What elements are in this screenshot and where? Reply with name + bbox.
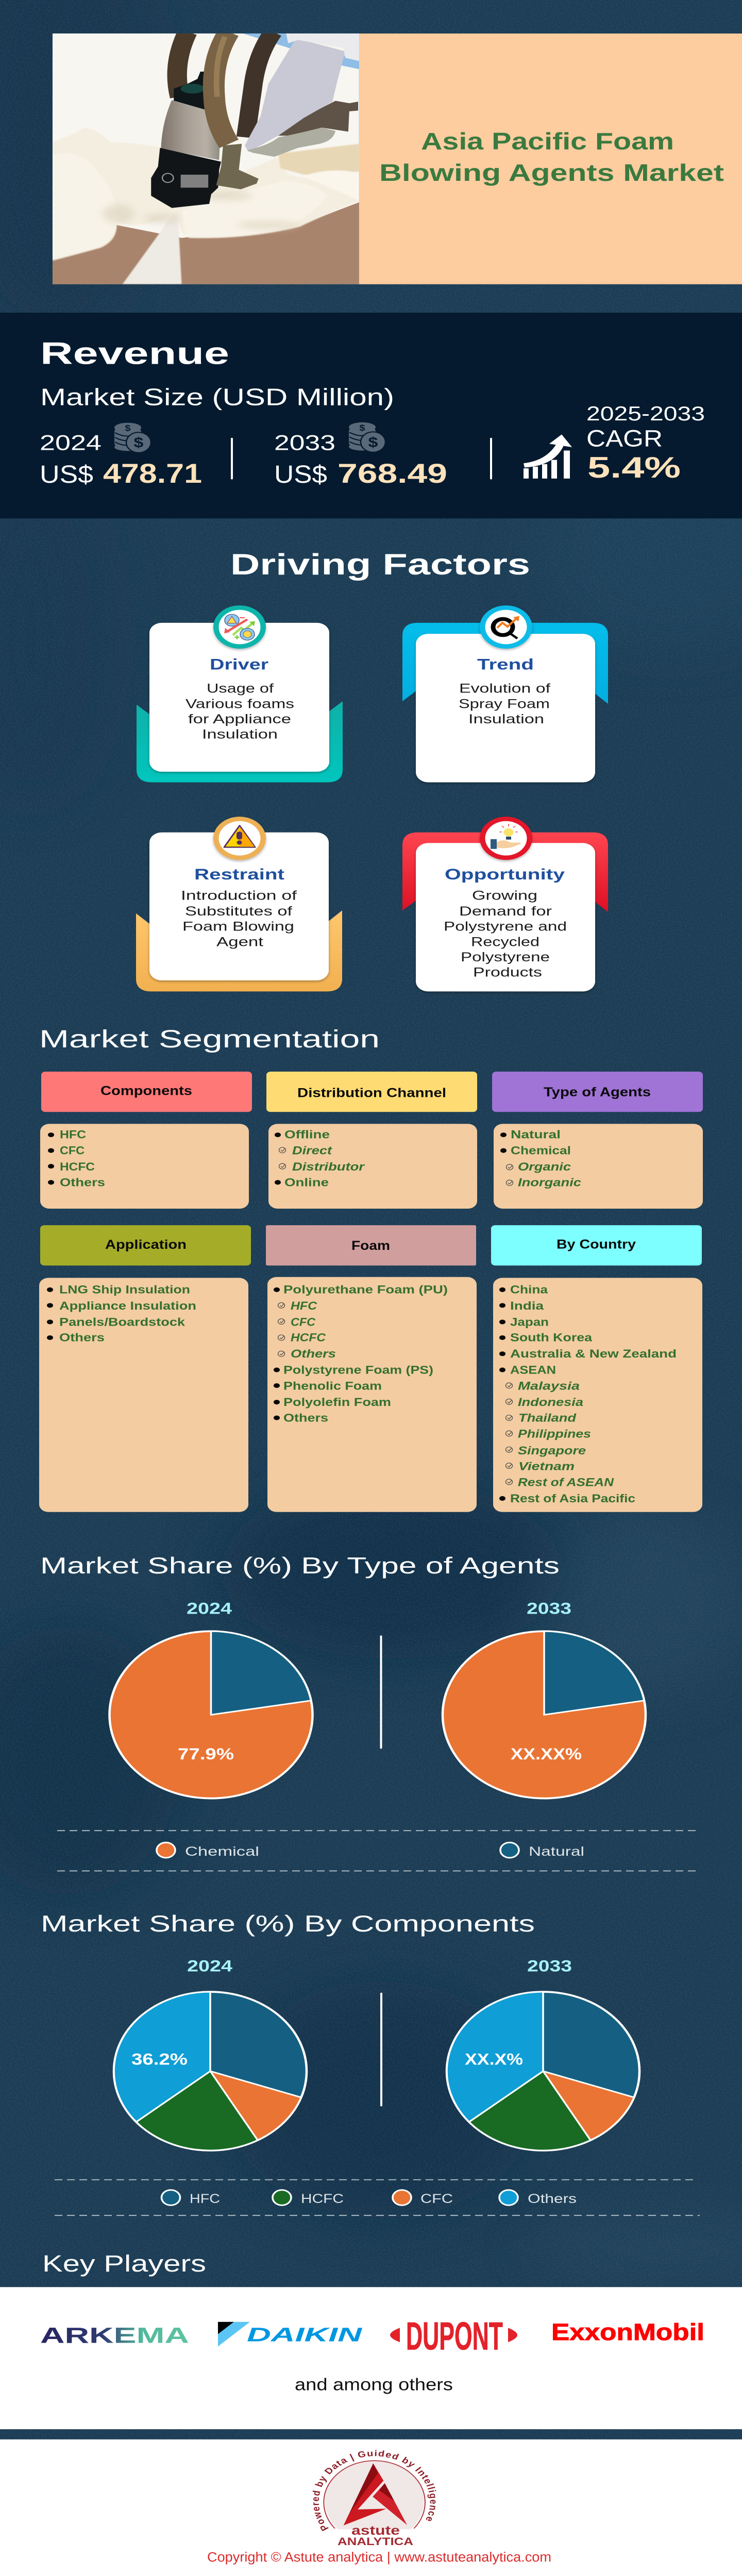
value label XX.XX%: XX.XX%	[511, 1745, 582, 1763]
legend: type of agents: Natural	[529, 1844, 584, 1858]
card: restraint	[136, 817, 342, 991]
list: by country: ASEAN	[510, 1364, 556, 1377]
chart: type of agents 2024	[109, 1600, 312, 1799]
list: distribution channel: Offline	[284, 1128, 330, 1141]
list: foam: CFC	[291, 1316, 316, 1329]
heading: trend: Trend	[477, 655, 534, 673]
text: driver description: Insulation	[202, 727, 278, 741]
icon: coin stack 2024: $	[125, 423, 131, 433]
panel: application header: Application	[105, 1238, 187, 1252]
stat: 2033 revenue: 768.49	[338, 459, 447, 489]
stat: 2033 revenue: 2033	[274, 431, 335, 455]
list: components	[40, 1124, 249, 1209]
CAGR stat: CAGR	[586, 425, 663, 451]
list: application: Appliance Insulation	[59, 1300, 196, 1312]
list: by country: Vietnam	[518, 1460, 575, 1473]
logo: Astute Analytica: ANALYTICA	[338, 2535, 413, 2548]
list: foam: HCFC	[291, 1332, 326, 1344]
list: by country: Indonesia	[518, 1396, 583, 1409]
panel: type of agents header	[492, 1072, 703, 1112]
list: by country: India	[510, 1300, 544, 1312]
panel: distribution channel header: Distribution Channel	[297, 1086, 446, 1100]
icon: coin stack 2033	[349, 422, 385, 452]
text: driver description: Usage of	[207, 681, 274, 696]
panel: by country header	[491, 1225, 702, 1265]
revenue panel	[0, 313, 742, 518]
panel: application header	[40, 1225, 251, 1265]
title	[379, 128, 724, 186]
gun body	[161, 100, 221, 160]
icon: coin stack 2024	[114, 423, 151, 453]
logo: Astute Analytica: astute	[351, 2523, 400, 2538]
panel: components header: Components	[100, 1083, 192, 1098]
list: distribution channel: Online	[284, 1176, 329, 1189]
heading: restraint: Restraint	[194, 866, 284, 883]
list: type of agents: Organic	[518, 1161, 571, 1173]
divider	[380, 1993, 382, 2106]
title: Blowing Agents Market	[379, 159, 724, 186]
list: by country: Rest of ASEAN	[518, 1477, 614, 1489]
list: type of agents: Inorganic	[518, 1176, 581, 1189]
pie: 2033 agents	[443, 1631, 646, 1799]
list: type of agents: Chemical	[511, 1145, 571, 1157]
text: trend description	[459, 681, 550, 726]
card: trend	[402, 605, 608, 782]
text: restraint description: Agent	[216, 935, 263, 949]
stat: 2024 revenue: 478.71	[103, 459, 202, 489]
connector	[216, 144, 259, 189]
logo: Daikin	[218, 2322, 363, 2347]
floor	[53, 202, 359, 284]
icon: driver gears and arrows	[213, 605, 266, 649]
value label 36.2%: 36.2%	[131, 2050, 188, 2069]
divider	[231, 438, 233, 480]
heading: key players: Key Players	[42, 2250, 206, 2277]
heading: revenue: Revenue	[40, 336, 229, 371]
legend: components: Others	[528, 2192, 577, 2206]
text: opportunity description: Polystyrene	[461, 950, 550, 964]
list: by country: Australia & New Zealand	[510, 1348, 677, 1360]
icon: coin stack 2033: $	[368, 434, 378, 450]
icon: trend magnifier	[480, 605, 532, 649]
legend: components: HCFC	[301, 2192, 344, 2206]
panel: key players logos	[0, 2287, 742, 2429]
list: components: HCFC	[60, 1161, 95, 1173]
stat: 2033 revenue: US$	[274, 461, 327, 488]
text: driver description: for Appliance	[188, 712, 291, 726]
text: opportunity description: Recycled	[471, 935, 539, 949]
list: foam	[267, 1277, 477, 1512]
logo: Astute Analytica: Powered by Data | Guided by Intelligence	[312, 2450, 436, 2531]
stat: 2024 revenue: 2024	[40, 431, 102, 455]
list: by country	[493, 1278, 702, 1512]
icon: coin stack 2024: $	[134, 435, 143, 451]
panel: foam header	[266, 1225, 476, 1265]
pie: 2033 components	[447, 1992, 639, 2150]
pie: 2024 agents	[109, 1631, 312, 1799]
list: foam: Others	[283, 1412, 328, 1425]
panel: footer	[0, 2439, 742, 2576]
legend: components: CFC	[420, 2192, 453, 2206]
logo: ExxonMobil: ExxonMobil	[551, 2319, 704, 2345]
CAGR stat: 2025-2033	[586, 403, 705, 425]
value label XX.X%: XX.X%	[465, 2050, 523, 2069]
stat: 2024 revenue	[40, 431, 202, 489]
list: by country: Thailand	[518, 1412, 577, 1425]
panel: foam header: Foam	[351, 1238, 390, 1252]
market size label: Market Size (USD Million)	[40, 384, 394, 410]
list: by country: Rest of Asia Pacific	[510, 1493, 635, 1505]
list: components: CFC	[60, 1145, 85, 1157]
logo: DuPont: DUPONT	[406, 2314, 503, 2358]
list: by country: Malaysia	[518, 1380, 580, 1393]
list: distribution channel: Distributor	[292, 1161, 365, 1173]
list: by country: Philippines	[518, 1428, 591, 1440]
card: driver	[137, 605, 343, 782]
year label 2033: 2033	[527, 1600, 571, 1618]
legend: components: HFC	[190, 2192, 220, 2206]
list: components: Others	[60, 1176, 105, 1189]
heading: driver: Driver	[210, 655, 268, 673]
text: restraint description: Substitutes of	[185, 904, 292, 918]
chart: components 2024	[114, 1957, 307, 2150]
list: foam: Others	[291, 1348, 336, 1360]
CAGR stat	[586, 403, 705, 484]
list: foam: Polyurethane Foam (PU)	[283, 1284, 448, 1296]
legend: components	[55, 2180, 700, 2215]
pie: 2024 components	[114, 1992, 307, 2150]
heading: market share by components: Market Share (%) By Components	[41, 1911, 535, 1937]
heading: market segmentation: Market Segmentation	[39, 1026, 380, 1053]
text: trend description: Evolution of	[459, 681, 550, 696]
logo: Arkema: ARKEMA	[40, 2324, 189, 2348]
list: by country: China	[510, 1284, 548, 1296]
list: type of agents	[494, 1124, 703, 1209]
title panel	[359, 33, 742, 284]
CAGR stat: 5.4%	[587, 451, 681, 484]
text: trend description: Spray Foam	[459, 697, 550, 711]
hoses	[177, 32, 188, 97]
list: by country: Japan	[510, 1316, 549, 1329]
list: foam: Phenolic Foam	[283, 1380, 382, 1393]
hero photo: spray foam gun	[53, 32, 359, 284]
text: opportunity description: Products	[473, 965, 542, 979]
text: opportunity description: Polystyrene and	[444, 919, 567, 934]
heading: opportunity: Opportunity	[445, 866, 565, 883]
panel: distribution channel header	[266, 1072, 477, 1112]
text: copyright: Copyright © Astute analytica | www.astuteanalytica.com	[207, 2550, 551, 2565]
panel: by country header: By Country	[556, 1237, 636, 1251]
icon: coin stack 2033: $	[359, 423, 365, 432]
heading: market share by type of agents: Market Share (%) By Type of Agents	[40, 1553, 560, 1579]
year label 2033: 2033	[527, 1957, 572, 1975]
chart: type of agents 2033	[443, 1600, 646, 1799]
text: driver description: Various foams	[185, 697, 294, 711]
glove	[245, 38, 345, 152]
legend: type of agents	[57, 1831, 700, 1871]
card: opportunity	[402, 817, 608, 991]
text: trend description: Insulation	[468, 712, 544, 726]
gun handle	[278, 101, 358, 135]
icon: idea in hand	[480, 817, 532, 860]
list: application: Others	[59, 1332, 105, 1344]
text: restraint description	[181, 888, 297, 949]
list: application: Panels/Boardstock	[59, 1316, 185, 1329]
stat: 2024 revenue: US$	[40, 461, 93, 488]
text: opportunity description: Demand for	[459, 904, 552, 918]
stat: 2033 revenue	[274, 431, 447, 489]
list: foam: HFC	[291, 1300, 317, 1312]
text: driver description	[185, 681, 294, 741]
text: restraint description: Foam Blowing	[182, 919, 294, 934]
logo: Daikin: DAIKIN	[247, 2324, 363, 2346]
list: components: HFC	[60, 1128, 86, 1141]
list: type of agents: Natural	[511, 1128, 561, 1141]
legend: type of agents: Chemical	[185, 1844, 259, 1858]
text: opportunity description: Growing	[472, 888, 537, 903]
year label 2024: 2024	[187, 1957, 233, 1975]
list: by country: South Korea	[510, 1332, 592, 1344]
list: distribution channel: Direct	[292, 1145, 333, 1157]
divider	[490, 438, 492, 480]
list: foam: Polystyrene Foam (PS)	[283, 1364, 433, 1377]
icon: warning triangle	[213, 817, 266, 860]
year label 2024: 2024	[187, 1600, 232, 1618]
title: Asia Pacific Foam	[421, 128, 674, 155]
list: application	[39, 1278, 248, 1512]
text: opportunity description	[444, 888, 567, 979]
text: restraint description: Introduction of	[181, 888, 297, 903]
list: application: LNG Ship Insulation	[59, 1284, 190, 1296]
foam piles	[53, 128, 359, 284]
logo: DuPont	[390, 2314, 517, 2358]
spray cone	[123, 212, 182, 284]
icon: growth chart arrow	[524, 434, 572, 479]
chart: components 2033	[447, 1957, 639, 2150]
text: and among others: and among others	[295, 2375, 453, 2394]
panel: components header	[41, 1072, 252, 1112]
panel: type of agents header: Type of Agents	[544, 1084, 651, 1099]
heading: driving factors: Driving Factors	[230, 548, 530, 581]
value label 77.9%: 77.9%	[178, 1745, 234, 1763]
list: distribution channel	[268, 1124, 477, 1209]
foam creases	[103, 191, 300, 229]
list: by country: Singapore	[518, 1445, 586, 1457]
divider	[380, 1635, 382, 1749]
list: foam: Polyolefin Foam	[283, 1396, 391, 1409]
